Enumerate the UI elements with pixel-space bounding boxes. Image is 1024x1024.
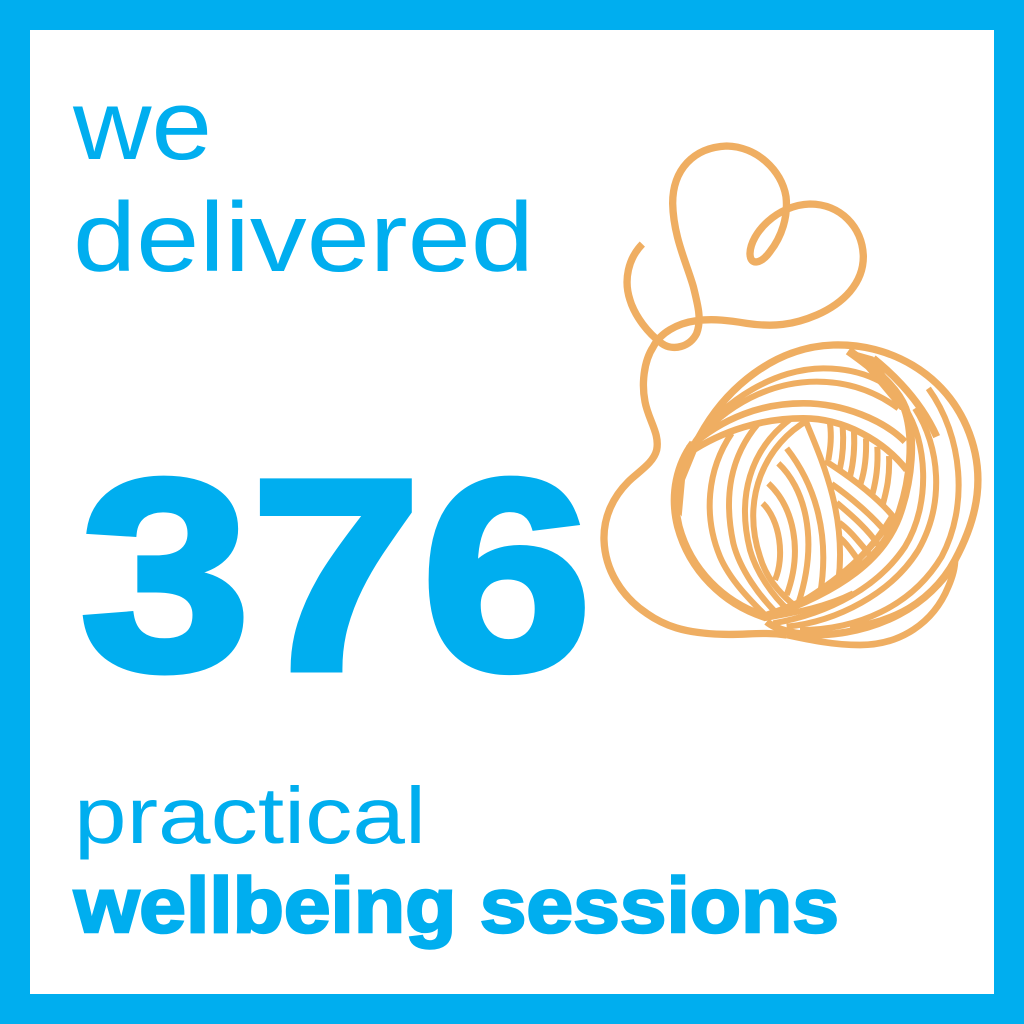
- lower band strands: [763, 515, 893, 618]
- right diagonal strands: [825, 461, 893, 565]
- heading: we delivered: delivered: [73, 182, 534, 292]
- thick yarn wedges: [673, 350, 910, 517]
- heading: we delivered: [72, 69, 534, 292]
- left curved strands: [710, 419, 840, 617]
- vertical hatching strands: [828, 423, 889, 505]
- caption: practical wellbeing sessions: wellbeing sessions: [73, 861, 839, 949]
- icon: yarn ball with heart-shaped thread: [604, 146, 978, 645]
- inner yarn circle: [675, 351, 911, 617]
- bottom loop of thread: [787, 560, 955, 645]
- heading: we delivered: we: [72, 69, 212, 180]
- outer yarn outline: [695, 345, 978, 635]
- right wrapping arcs: [773, 358, 959, 630]
- caption: practical wellbeing sessions: practical: [74, 771, 426, 860]
- big number 376: 376: [80, 423, 592, 727]
- top arcs: [688, 368, 907, 470]
- heart thread: [604, 146, 863, 635]
- caption: practical wellbeing sessions: [73, 771, 839, 949]
